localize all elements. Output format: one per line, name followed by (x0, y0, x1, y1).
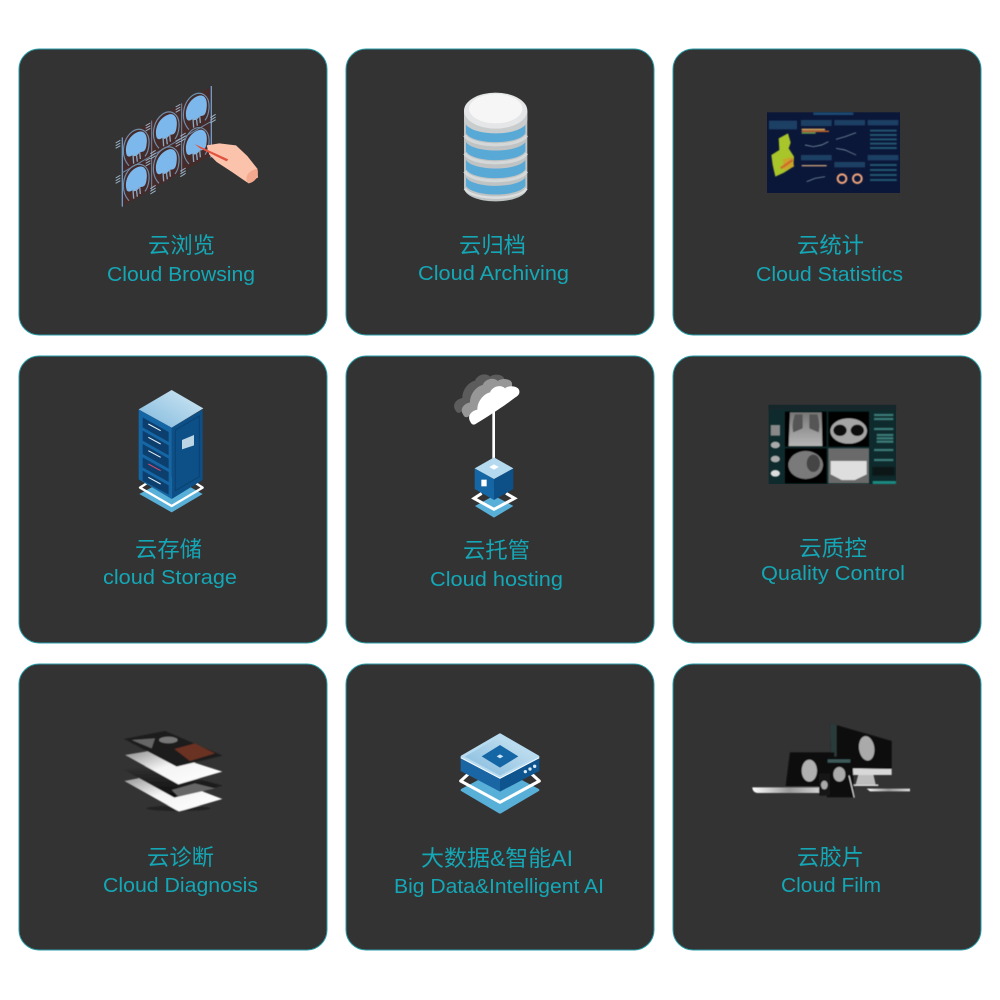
heading: 大数据&智能AI: 大数据&智能AI (421, 846, 573, 871)
panel: Cloud Statistics (673, 49, 981, 335)
icon: medical imaging software (769, 405, 896, 484)
icon: data box (461, 735, 539, 812)
icon: database cylinder (464, 93, 527, 201)
label: Cloud Diagnosis: Cloud Diagnosis (103, 875, 258, 897)
panel: cloud Storage (19, 356, 327, 643)
heading: 云胶片: 云胶片 (797, 845, 864, 870)
panel: Big Data & Intelligent AI (346, 664, 654, 950)
panel: Cloud Archiving (346, 49, 654, 335)
heading: 云质控: 云质控 (799, 536, 867, 561)
heading: 云存储: 云存储 (135, 537, 202, 562)
icon: server rack (139, 390, 203, 512)
panel: Cloud hosting (346, 356, 654, 643)
label: cloud Storage: cloud Storage (103, 567, 237, 589)
label: Big Data&Intelligent AI: Big Data&Intelligent AI (394, 876, 604, 898)
label: Cloud Browsing: Cloud Browsing (107, 264, 255, 286)
icon: multi-device display (752, 723, 910, 798)
heading: 云归档: 云归档 (459, 233, 526, 258)
label: Quality Control: Quality Control (761, 563, 905, 585)
label: Cloud hosting: Cloud hosting (430, 569, 563, 591)
panel: Cloud Browsing (19, 49, 327, 335)
heading: 云浏览: 云浏览 (148, 233, 215, 258)
label: Cloud Statistics: Cloud Statistics (756, 264, 903, 286)
icon: cloud linked to cube (454, 374, 519, 518)
heading: 云托管: 云托管 (463, 538, 530, 563)
heading: 云诊断: 云诊断 (147, 845, 214, 870)
icon: statistics dashboard (767, 112, 900, 193)
icon: hand touching brain scans (116, 86, 258, 207)
panel: Cloud Film (673, 664, 981, 950)
icon: stacked image layers (124, 731, 222, 812)
label: Cloud Archiving: Cloud Archiving (418, 263, 569, 285)
panel: Cloud Diagnosis (19, 664, 327, 950)
label: Cloud Film: Cloud Film (781, 875, 881, 897)
panel: Quality Control (673, 356, 981, 643)
heading: 云统计: 云统计 (797, 233, 864, 258)
